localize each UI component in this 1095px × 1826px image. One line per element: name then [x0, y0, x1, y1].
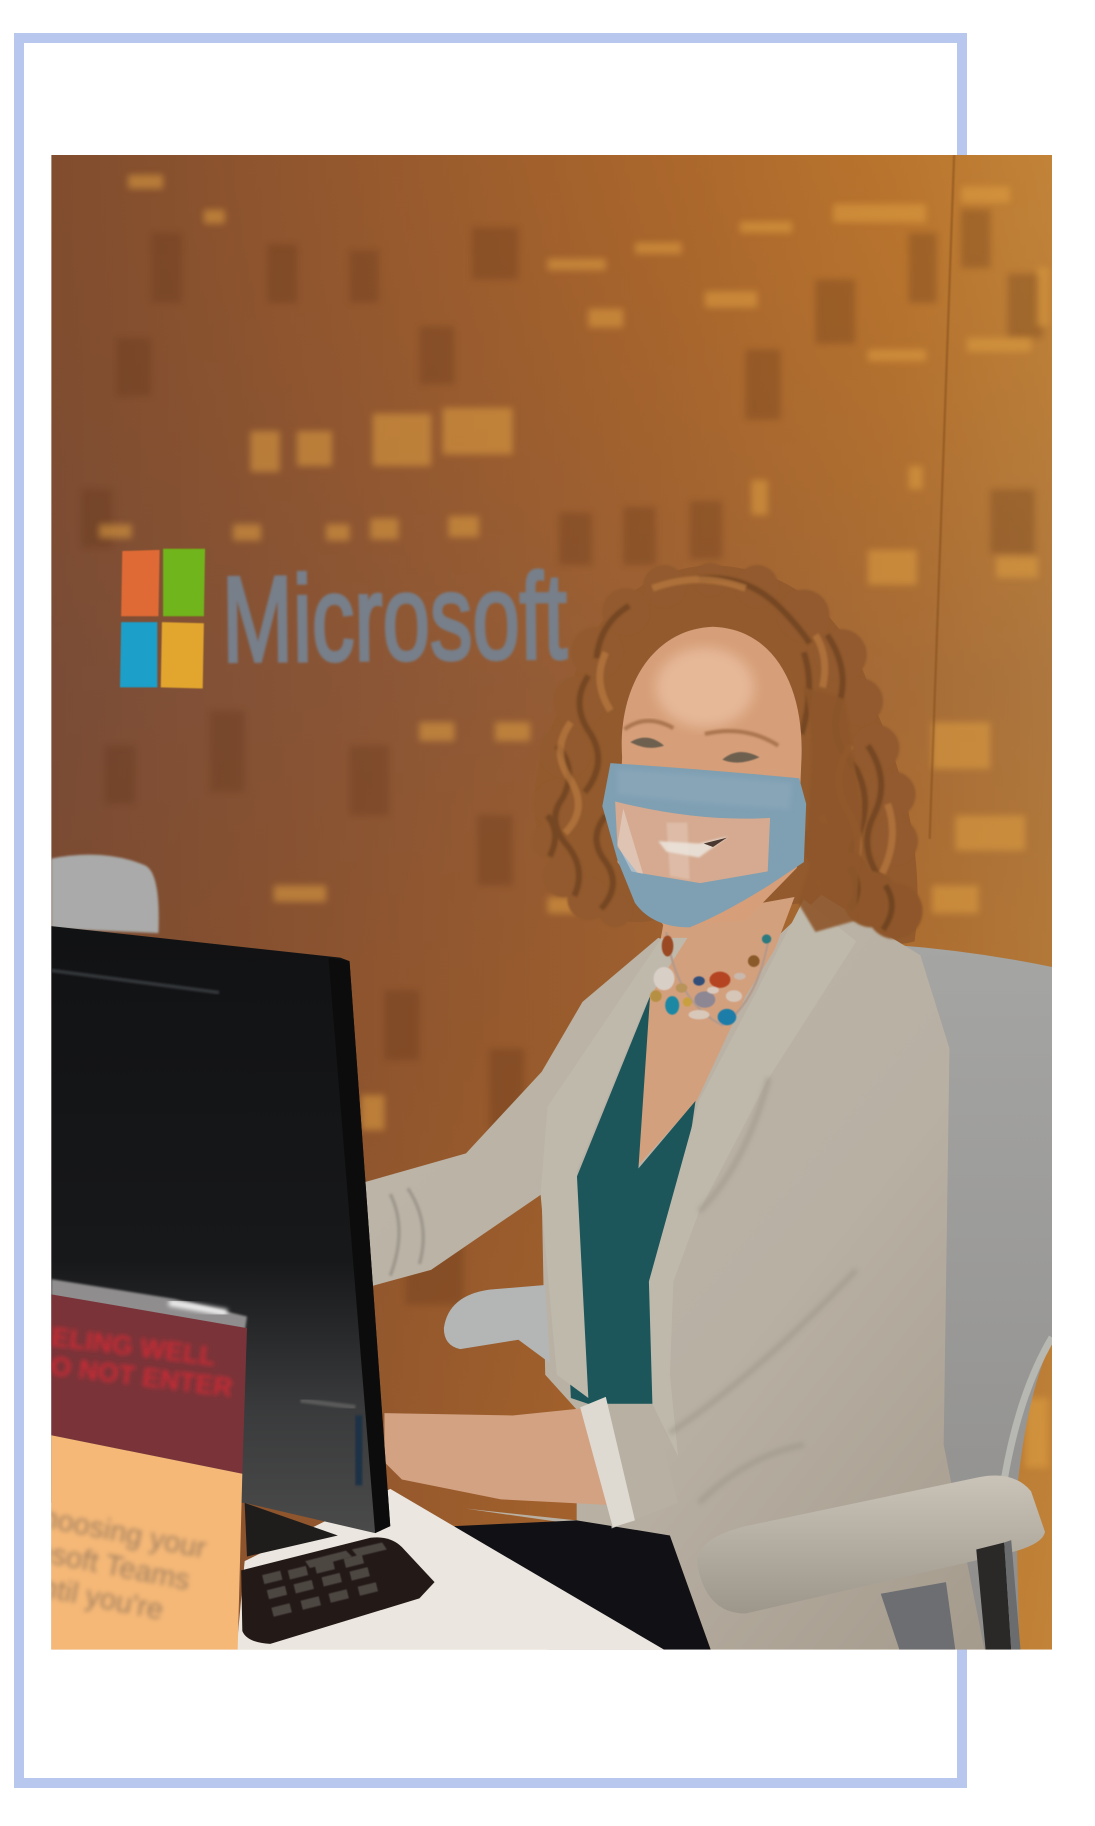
- mouth smile: [658, 836, 728, 857]
- desk: [236, 1489, 664, 1650]
- hair lock over the face edge: [798, 687, 862, 932]
- forearm: [384, 1407, 612, 1505]
- Microsoft logo sign: [120, 548, 568, 689]
- clear sign holder edge: [51, 1279, 247, 1334]
- teal blouse: [563, 996, 696, 1404]
- sign text: choosing your: [25, 1499, 209, 1565]
- woman's hair back: [532, 563, 918, 944]
- eyebrows: [624, 721, 778, 746]
- background chair: [51, 855, 159, 933]
- face: [617, 627, 802, 926]
- blurred desk sign: [0, 1279, 247, 1650]
- jacket lapels: [540, 900, 810, 1454]
- clear window: [615, 802, 770, 883]
- computer monitor: [51, 926, 390, 1556]
- photo: woman at reception desk: [51, 155, 1052, 1650]
- office chair back: [904, 946, 1052, 1650]
- chair armrest: [697, 1475, 1045, 1650]
- hair curls over the shoulder: [846, 856, 924, 940]
- numeric keypad: [241, 1537, 435, 1644]
- dark trousers: [454, 1520, 711, 1650]
- left sleeve folds: [390, 1188, 423, 1276]
- jacket: [363, 895, 984, 1650]
- wood panel wall: [51, 155, 1052, 1650]
- maroon header: [51, 1294, 247, 1474]
- eyes: [630, 738, 760, 763]
- peach body: [51, 1435, 242, 1650]
- sign text: DO NOT ENTER: [30, 1348, 234, 1403]
- sign text: [0, 1317, 234, 1627]
- clear-window face mask: [602, 763, 806, 927]
- monitor stand: [245, 1503, 338, 1556]
- sign text: FEELING WELL: [16, 1317, 217, 1372]
- mask fabric: [602, 763, 806, 927]
- Microsoft wordmark: Microsoft: [221, 548, 568, 688]
- beaded necklace: [650, 932, 771, 1025]
- sign text: until you're: [22, 1569, 166, 1627]
- neck and chest skin: [638, 897, 795, 1165]
- vertical panel seam: [930, 155, 954, 839]
- jacket shadow folds: [670, 1078, 856, 1503]
- left armrest: [444, 1285, 550, 1363]
- mask top highlight: [622, 773, 786, 804]
- four-colour logo squares: [120, 549, 205, 689]
- jacket cuff: [580, 1396, 652, 1528]
